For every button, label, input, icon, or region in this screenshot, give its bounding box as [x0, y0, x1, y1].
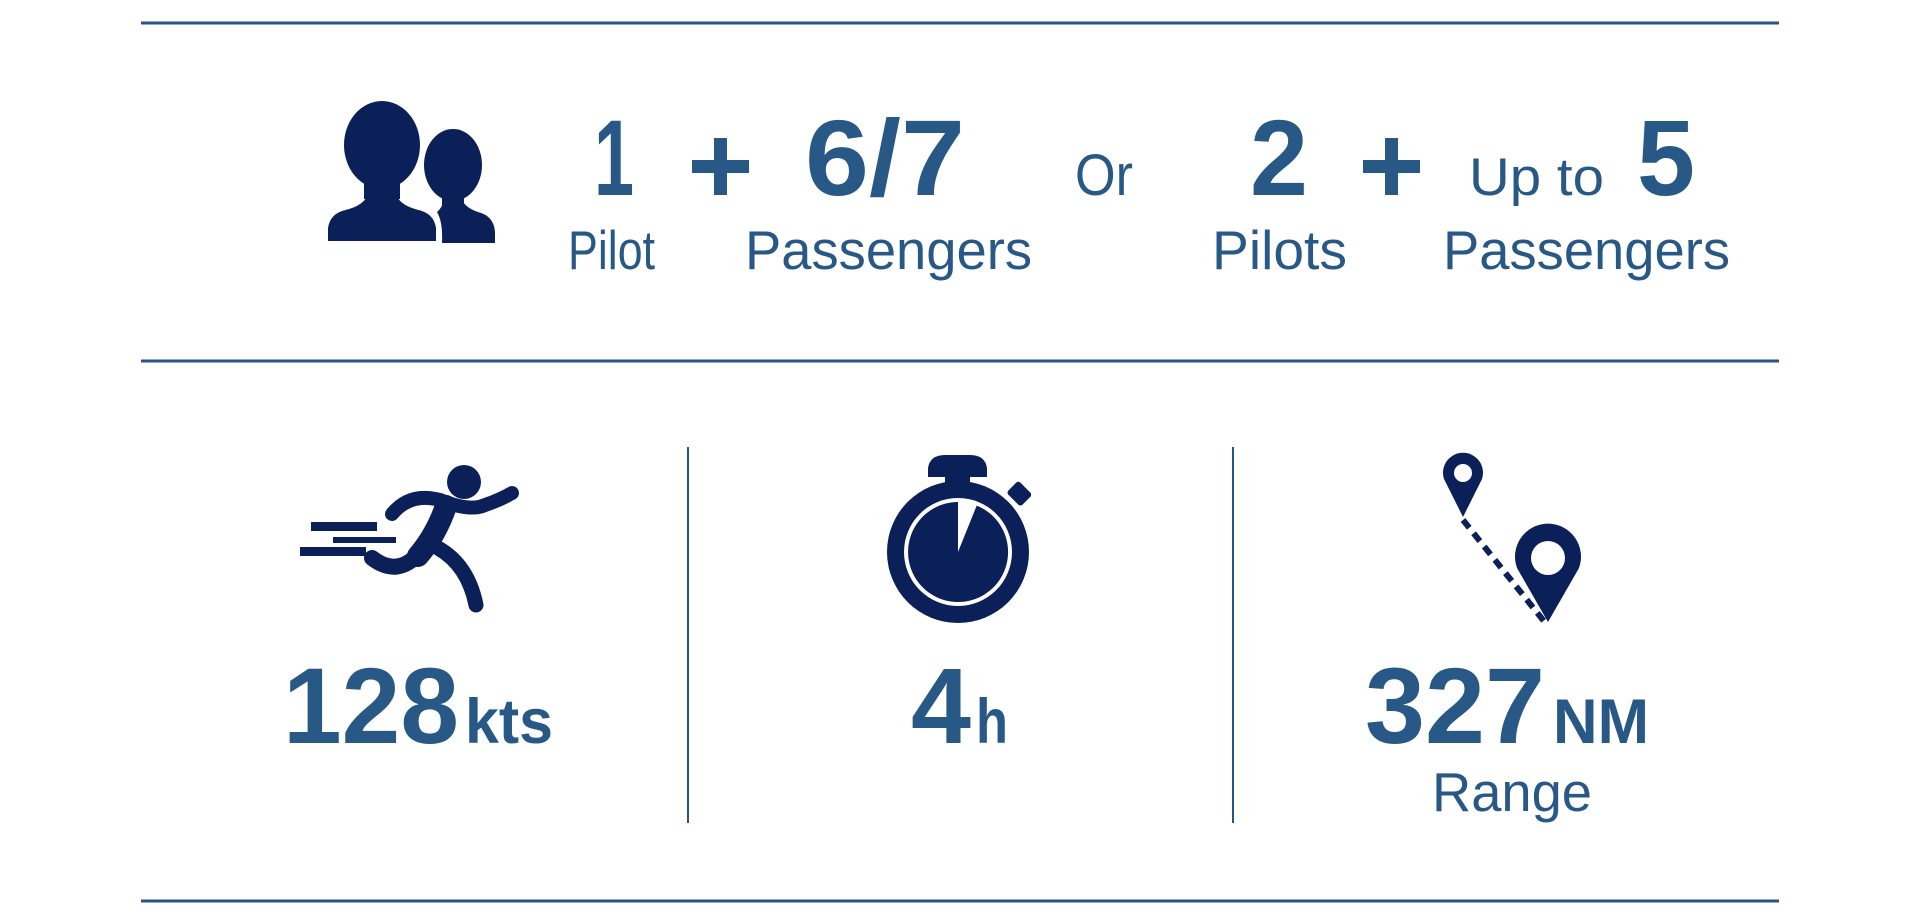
stat: range: Range	[1432, 761, 1592, 823]
stat: speed: kts	[465, 687, 553, 757]
stat: speed	[283, 645, 553, 766]
stat: range: 327	[1365, 645, 1545, 766]
stat: up to 5 passengers	[1443, 97, 1730, 281]
text: Or: Or	[1075, 143, 1133, 208]
stat: 2 pilots: Pilots	[1212, 219, 1347, 281]
stat: 2 pilots	[1212, 97, 1347, 281]
stat: range: NM	[1553, 687, 1649, 757]
stat: up to 5 passengers: Up to	[1469, 148, 1604, 207]
icon: people	[326, 101, 495, 243]
stat: 1 pilot	[568, 97, 655, 281]
icon: plus	[692, 138, 749, 195]
stat: speed: 128	[283, 645, 459, 766]
stat: 1 pilot: 1	[594, 97, 634, 218]
stat: 1 pilot: Pilot	[568, 219, 655, 281]
icon: runner	[300, 465, 512, 605]
stat: endurance	[911, 645, 1008, 766]
stat: range	[1365, 645, 1649, 823]
stat: 6/7 passengers	[745, 97, 1032, 281]
stat: endurance: 4	[911, 645, 971, 766]
stat: 2 pilots: 2	[1250, 97, 1308, 218]
stat: up to 5 passengers: 5	[1637, 97, 1695, 218]
stat: 6/7 passengers: 6/7	[805, 97, 965, 218]
stat: up to 5 passengers: Passengers	[1443, 219, 1730, 281]
stat: 6/7 passengers: Passengers	[745, 219, 1032, 281]
icon: stopwatch	[887, 455, 1032, 623]
icon: map pins	[1443, 453, 1581, 625]
stat: endurance: h	[976, 687, 1008, 757]
icon: plus	[1363, 138, 1420, 195]
